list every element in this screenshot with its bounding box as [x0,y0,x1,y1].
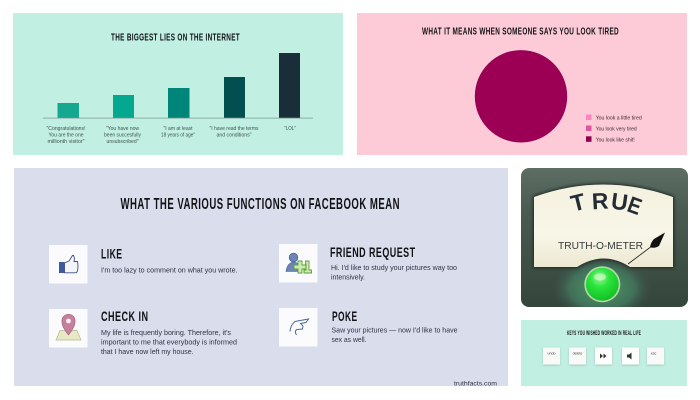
button glow [559,262,645,307]
pie chart [475,50,567,142]
legend: You look very tired [596,126,637,132]
icon: thumbs up [49,245,88,284]
face shadow [534,184,673,267]
bar labels: 18 years of age" [161,133,195,139]
text: check in: that I have now left my house. [101,347,194,356]
bar labels: been succesfully [104,133,141,139]
verdict: true: R [591,188,609,214]
panel: keys you wished worked in real life [521,320,687,386]
verdict: true: E [624,192,645,220]
bar labels: You are the one [48,133,84,139]
heading: keys: KEYS YOU WISHED WORKED IN REAL LIFE [567,331,641,337]
panel: facebook functions [14,168,508,388]
truth-o-meter gauge [521,168,688,320]
key row [543,348,664,366]
icon: poking hand [279,308,318,346]
bar labels: "You have now [106,126,140,132]
text: check in: important to me that everybody is informed [101,338,237,346]
meter face [534,184,673,267]
text: check in [101,328,237,356]
needle [628,232,665,264]
bar labels: "Congratulations! [46,126,86,132]
heading: facebook functions: WHAT THE VARIOUS FUNCTIONS ON FACEBOOK MEAN [120,196,400,213]
text: poke [332,326,458,344]
text: check in: My life is frequently boring. Therefore, it's [101,328,231,337]
key row: delete [573,352,582,356]
key row: esc [651,352,656,356]
bar labels: and conditions" [216,133,252,139]
verdict: true: T [568,188,588,217]
heading: biggest lies: THE BIGGEST LIES ON THE INTERNET [111,32,240,44]
bar labels: "I am at least [164,126,193,132]
panel: biggest lies bar chart [13,13,343,155]
text: poke: Saw your pictures — now I'd like to have [332,326,458,334]
item: poke [279,308,458,346]
text: friend request: intensively. [331,272,365,282]
panel: look tired pie chart [357,13,687,155]
legend [586,114,642,143]
item: like [49,245,238,284]
item: check in [49,308,237,356]
verdict: true: U [610,188,630,216]
heading: like: LIKE [101,246,122,262]
heading: check in: CHECK IN [101,308,148,324]
text: poke: sex as well. [332,335,366,344]
source credit: truthfacts.com [454,381,498,388]
icon: add friend [279,244,318,282]
legend: You look a little tired [596,116,642,122]
verdict: true [568,188,645,220]
bar labels: millionth visitor" [48,139,84,145]
green indicator button [584,266,620,302]
text: friend request [331,263,457,282]
text: friend request: Hi. I'd like to study your pictures way too [331,263,457,272]
meter body [521,168,688,307]
legend: You look like shit! [596,137,635,143]
label: truth-o-meter: TRUTH-O-METER [558,241,643,252]
heading: friend request: FRIEND REQUEST [330,244,416,260]
key row: undo [548,352,556,356]
bar chart [43,53,313,118]
icon: map pin [49,309,88,348]
bar labels [46,126,296,145]
heading: poke: POKE [332,308,358,324]
bar labels: "LOL" [284,126,296,132]
item: friend request [279,244,457,282]
bar labels: "I have read the terms [210,126,259,132]
text: like: I'm too lazy to comment on what you wrote. [101,266,238,274]
bar labels: unsubscribed" [106,139,138,145]
